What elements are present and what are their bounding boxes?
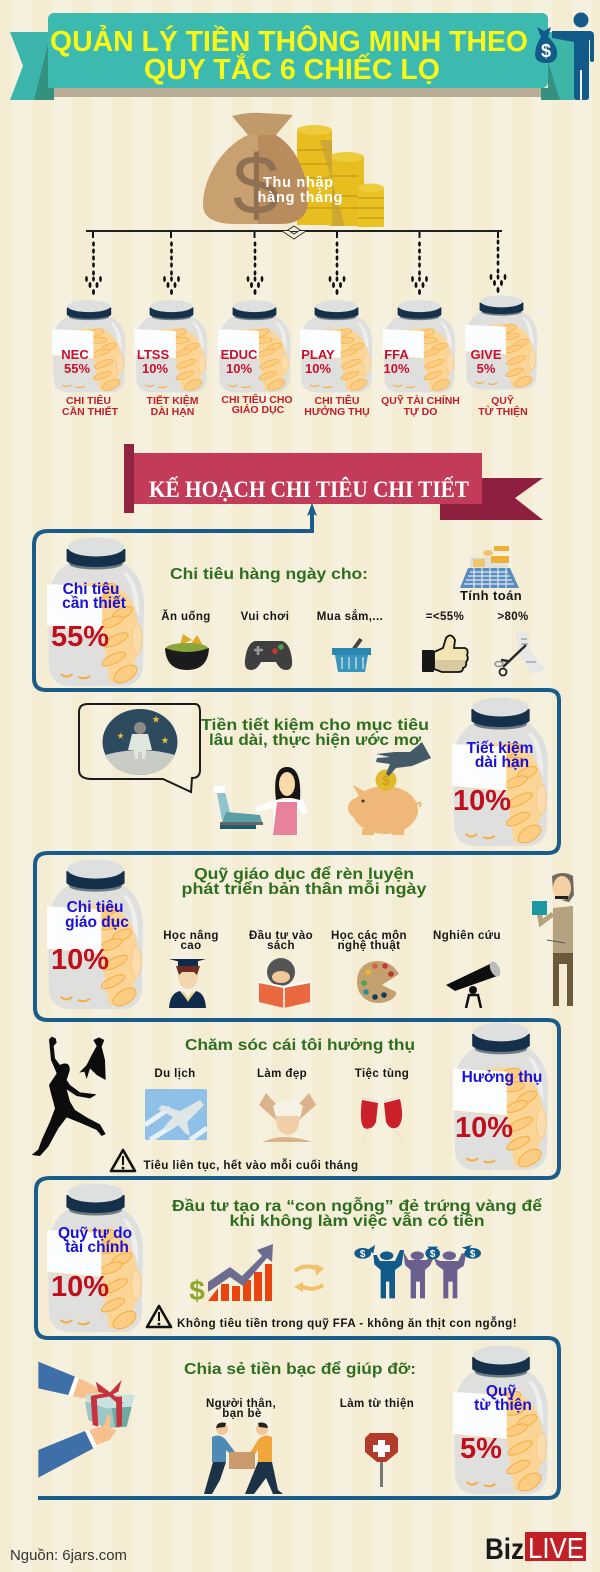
icon: two people carrying box bbox=[204, 1423, 283, 1494]
icon: scissors and receipt bbox=[495, 632, 545, 676]
source credit: Nguồn: 6jars.com bbox=[10, 1548, 127, 1564]
icon: cycle arrows bbox=[294, 1264, 324, 1292]
jar: GIVE: QUỸ bbox=[491, 394, 514, 407]
label: nghiên cứu: Nghiên cứu bbox=[433, 930, 501, 942]
icon: speech bubble with astronaut: ★ bbox=[161, 736, 169, 745]
heading: Chi tiêu hàng ngày cho: bbox=[170, 566, 368, 583]
heading: Chăm sóc cái tôi hưởng thụ bbox=[185, 1037, 415, 1054]
jar: NEC: CHI TIÊU bbox=[66, 394, 111, 407]
jar: NEC: NEC bbox=[61, 347, 89, 362]
jar: PLAY: PLAY bbox=[301, 347, 335, 362]
heading: lâu dài, thực hiện ước mơ bbox=[209, 732, 422, 749]
heading: Đầu tư tạo ra “con ngỗng” đẻ trứng vàng để bbox=[172, 1196, 542, 1215]
heading bbox=[182, 865, 427, 898]
jar: EDUC: 10% bbox=[226, 361, 252, 376]
jar: chi tiêu cần thiết bbox=[47, 538, 144, 687]
icon: telescope bbox=[446, 960, 502, 1008]
icon: speech bubble with astronaut: ★ bbox=[117, 732, 124, 740]
jar: quỹ từ thiện: từ thiện bbox=[474, 1397, 532, 1414]
label: học nâng cao: cao bbox=[180, 940, 202, 952]
jar: hưởng thụ: Hưởng thụ bbox=[462, 1069, 542, 1086]
jar: quỹ tự do tài chính: Quỹ tự do bbox=[58, 1225, 132, 1242]
icon: piggy bank with hand bbox=[348, 742, 431, 835]
jar: FFA: TỰ DO bbox=[404, 406, 437, 418]
icon: bowl bbox=[165, 634, 209, 670]
icon: wine glasses bbox=[361, 1097, 403, 1140]
jar: chi tiêu giáo dục bbox=[47, 860, 143, 1010]
label: under 55: =<55% bbox=[426, 611, 464, 623]
icon: money bag and coins with income label bbox=[203, 113, 384, 232]
jar: FFA: QUỸ TÀI CHÍNH bbox=[381, 394, 460, 407]
jar: PLAY: 10% bbox=[305, 361, 331, 376]
icon: money bag and coins with income label: hàng tháng bbox=[258, 190, 342, 206]
icon: person reading bbox=[259, 958, 310, 1008]
jar: LTSS: 10% bbox=[142, 361, 168, 376]
icon: dancers silhouette bbox=[32, 1037, 106, 1156]
jar: LTSS: TIẾT KIỆM bbox=[147, 394, 199, 407]
jar: FFA: FFA bbox=[384, 347, 409, 362]
jar: quỹ từ thiện bbox=[453, 1346, 548, 1495]
jar: LTSS: LTSS bbox=[137, 347, 169, 362]
title banner: QUY TẮC 6 CHIẾC LỌ bbox=[144, 52, 440, 86]
icon: palette bbox=[357, 961, 399, 1003]
panel: play bbox=[32, 1022, 548, 1172]
jar: quỹ từ thiện: Quỹ bbox=[486, 1383, 516, 1400]
icon: gamepad bbox=[245, 641, 292, 670]
jar: GIVE: GIVE bbox=[470, 347, 502, 362]
heading: Tiền tiết kiệm cho mục tiêu bbox=[201, 717, 429, 734]
label: học nâng cao bbox=[163, 930, 219, 952]
label: ăn uống: Ăn uống bbox=[161, 610, 211, 623]
title banner bbox=[10, 13, 574, 100]
jar: LTSS: DÀI HẠN bbox=[151, 405, 194, 418]
jar: EDUC: EDUC bbox=[221, 347, 258, 362]
label: làm từ thiện: Làm từ thiện bbox=[340, 1398, 414, 1410]
icon: thumbs up bbox=[422, 635, 468, 672]
label: tính toán: Tính toán bbox=[460, 588, 522, 603]
icon: warning bbox=[147, 1306, 171, 1327]
panel: long-term savings bbox=[79, 698, 548, 847]
jar: PLAY: CHI TIÊU bbox=[315, 394, 359, 407]
logo: BizLIVE bbox=[485, 1532, 586, 1566]
jar: chi tiêu giáo dục: giáo dục bbox=[65, 914, 129, 931]
panel: necessities bbox=[47, 538, 545, 687]
icon: graduate bbox=[169, 959, 206, 1008]
jar: quỹ tự do tài chính bbox=[47, 1184, 143, 1333]
warning text: Không tiêu tiền trong quỹ FFA - không ăn thịt con ngỗng! bbox=[177, 1317, 517, 1330]
label: vui chơi: Vui chơi bbox=[241, 611, 289, 623]
label: đầu tư vào sách bbox=[249, 930, 313, 952]
panel: give bbox=[38, 1346, 548, 1495]
icon: man holding money bag bbox=[535, 12, 594, 100]
icon: calculator bbox=[460, 546, 519, 588]
jar: EDUC bbox=[218, 300, 293, 416]
section ribbon bbox=[124, 444, 543, 520]
jar: FFA: 10% bbox=[383, 361, 410, 376]
label: du lịch: Du lịch bbox=[154, 1068, 196, 1080]
jar: PLAY bbox=[300, 300, 372, 418]
jar: quỹ từ thiện: 5% bbox=[460, 1433, 502, 1465]
jar: chi tiêu giáo dục: Chi tiêu bbox=[67, 899, 123, 916]
jar: quỹ tự do tài chính: tài chính bbox=[65, 1239, 129, 1256]
jar: chi tiêu giáo dục: 10% bbox=[51, 944, 109, 976]
jar: GIVE: TỪ THIỆN bbox=[478, 405, 528, 418]
label: đầu tư vào sách: Đầu tư vào bbox=[249, 930, 313, 942]
label: học các môn nghệ thuật bbox=[331, 930, 407, 952]
jar: EDUC: GIÁO DỤC bbox=[232, 403, 285, 416]
label: người thân bạn bè: bạn bè bbox=[222, 1408, 262, 1420]
jar: tiết kiệm dài hạn: dài hạn bbox=[475, 754, 529, 771]
icon: people holding money bags: $ bbox=[470, 1249, 476, 1260]
icon: growth chart: $ bbox=[189, 1275, 205, 1306]
section ribbon: KẾ HOẠCH CHI TIÊU CHI TIẾT bbox=[149, 476, 469, 502]
logo: BizLIVE: Biz bbox=[485, 1533, 524, 1566]
icon: piggy bank with hand: $ bbox=[382, 773, 390, 788]
icon: warning bbox=[111, 1150, 135, 1171]
jar: quỹ tự do tài chính: 10% bbox=[51, 1271, 109, 1303]
icon: airplane bbox=[145, 1089, 207, 1140]
icon: speech bubble with astronaut bbox=[79, 704, 200, 792]
heading: phát triển bản thân mỗi ngày bbox=[182, 879, 427, 898]
title banner: QUẢN LÝ TIỀN THÔNG MINH THEO bbox=[50, 24, 528, 58]
label: mua sắm: Mua sắm,... bbox=[317, 610, 383, 623]
icon: speech bubble with astronaut: ★ bbox=[152, 715, 160, 724]
icon: hands giving gift bbox=[38, 1362, 135, 1478]
serpentine panel border with arrow bbox=[34, 503, 559, 1498]
heading bbox=[201, 717, 429, 749]
logo: BizLIVE: LIVE bbox=[528, 1533, 584, 1565]
icon: teacher bbox=[532, 873, 574, 1006]
icon: man holding money bag: $ bbox=[541, 41, 551, 61]
label: học các môn nghệ thuật: nghệ thuật bbox=[338, 940, 400, 952]
jar: GIVE bbox=[465, 295, 537, 418]
jar: chi tiêu cần thiết: cần thiết bbox=[62, 595, 126, 612]
heading bbox=[172, 1196, 542, 1230]
panel: education bbox=[47, 860, 574, 1010]
jar: PLAY: HƯỞNG THỤ bbox=[304, 405, 370, 418]
jar: NEC bbox=[52, 300, 125, 418]
label: người thân bạn bè: Người thân, bbox=[206, 1398, 276, 1410]
panel: financial freedom bbox=[47, 1184, 542, 1333]
jar: FFA bbox=[381, 300, 460, 418]
jar: tiết kiệm dài hạn bbox=[452, 698, 548, 847]
icon: people holding money bags bbox=[354, 1245, 481, 1298]
label: học nâng cao: Học nâng bbox=[163, 930, 219, 942]
heading: Chia sẻ tiền bạc để giúp đỡ: bbox=[184, 1360, 416, 1378]
distribution line with drips bbox=[85, 226, 506, 295]
label: làm đẹp: Làm đẹp bbox=[257, 1068, 307, 1080]
warning text: Tiêu liên tục, hết vào mỗi cuối tháng bbox=[144, 1159, 358, 1172]
icon: growth chart bbox=[189, 1244, 273, 1306]
label: đầu tư vào sách: sách bbox=[267, 940, 295, 952]
icon: money bag and coins with income label: Thu nhập bbox=[263, 175, 333, 191]
icon: spa massage bbox=[259, 1093, 316, 1142]
jar: chi tiêu cần thiết: Chi tiêu bbox=[63, 581, 119, 598]
label: tiệc tùng: Tiệc tùng bbox=[355, 1068, 409, 1080]
jar: NEC: CẦN THIẾT bbox=[62, 405, 119, 418]
icon: money bag and coins with income label: $ bbox=[233, 138, 279, 232]
jar: LTSS bbox=[135, 300, 207, 418]
jar: GIVE: 5% bbox=[477, 361, 496, 376]
jar: chi tiêu cần thiết: 55% bbox=[51, 621, 109, 653]
icon: red cross sign bbox=[365, 1433, 398, 1487]
jar: hưởng thụ bbox=[453, 1022, 548, 1171]
jar: EDUC: CHI TIÊU CHO bbox=[221, 393, 293, 406]
icon: girl at typewriter bbox=[214, 767, 307, 835]
jar: NEC: 55% bbox=[64, 361, 90, 376]
label: học các môn nghệ thuật: Học các môn bbox=[331, 930, 407, 942]
label: người thân bạn bè bbox=[206, 1398, 276, 1420]
icon: basket bbox=[332, 639, 371, 672]
jar: tiết kiệm dài hạn: 10% bbox=[453, 785, 511, 817]
heading: khi không làm việc vẫn có tiền bbox=[230, 1211, 484, 1230]
icon: people holding money bags: $ bbox=[360, 1249, 366, 1260]
heading: Quỹ giáo dục để rèn luyện bbox=[194, 865, 414, 883]
label: over 80: >80% bbox=[497, 611, 529, 623]
icon: people holding money bags: $ bbox=[430, 1249, 436, 1260]
jar: hưởng thụ: 10% bbox=[455, 1112, 513, 1144]
jar: tiết kiệm dài hạn: Tiết kiệm bbox=[467, 740, 533, 757]
